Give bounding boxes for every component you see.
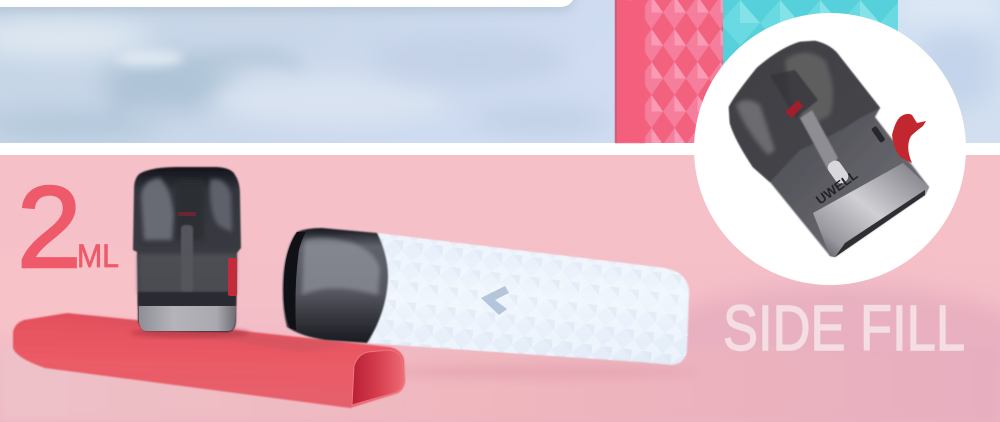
red device shell lying flat <box>13 313 405 408</box>
pod close-up: UWELL <box>813 167 861 207</box>
red diamond-textured device <box>615 0 723 143</box>
red silicone plug <box>892 114 926 163</box>
white device with dark cap <box>282 228 689 365</box>
teal diamond-textured device <box>723 0 898 143</box>
panel: marble background <box>0 0 1000 143</box>
logo mark on device <box>481 286 509 315</box>
circle inset: side fill close-up <box>694 13 966 285</box>
title: 2 ML capacity: ML <box>77 238 119 274</box>
white rounded card with shadow <box>0 0 575 12</box>
standing pod <box>130 167 250 338</box>
pod close-up <box>729 41 929 257</box>
panel: pink background <box>0 155 1000 422</box>
title: 2 ML capacity <box>17 162 119 292</box>
title: 2 ML capacity: 2 <box>17 162 82 292</box>
